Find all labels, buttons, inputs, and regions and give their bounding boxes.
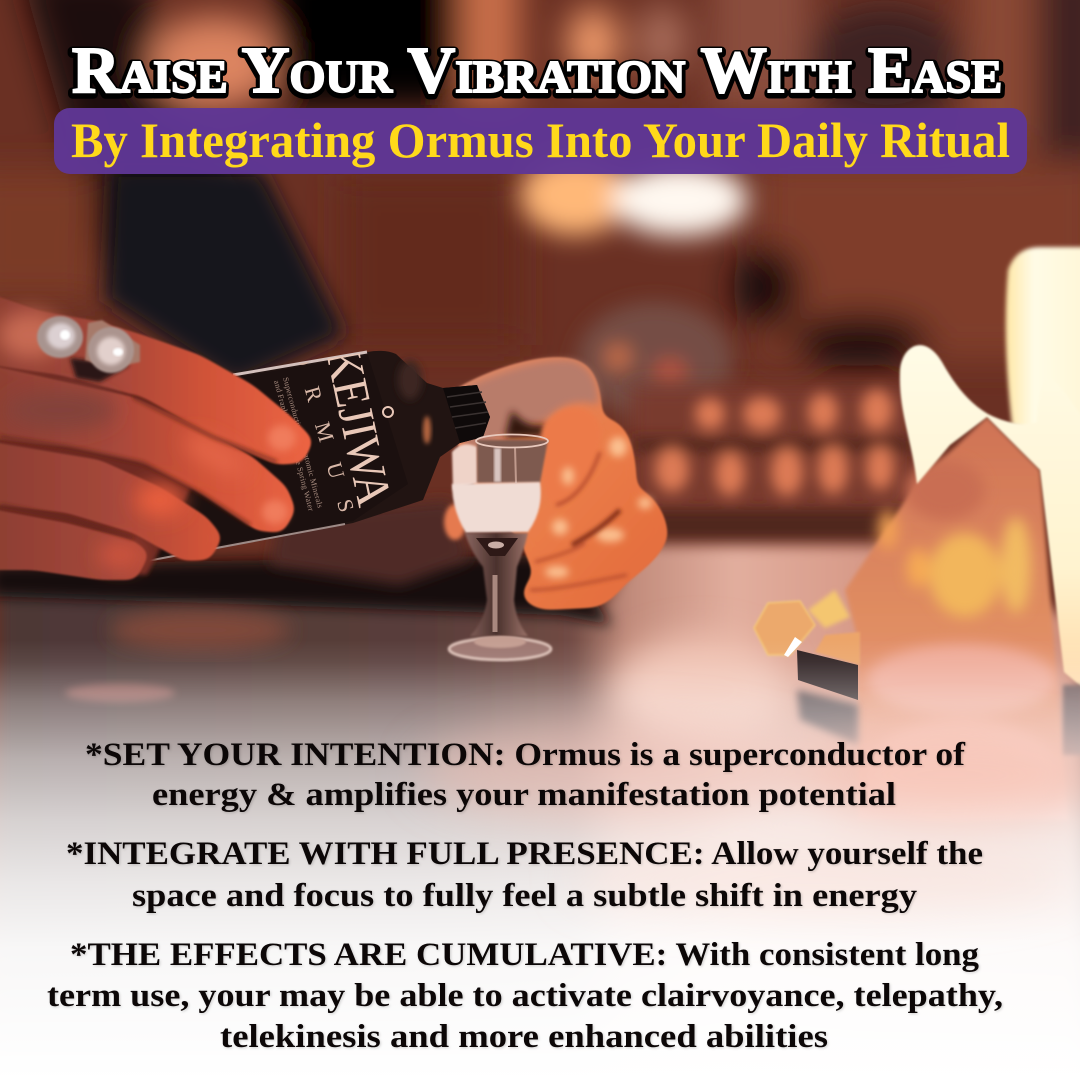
ormus bottle	[151, 350, 490, 561]
point 3: the effects are cumulative: telekinesis and more enhanced abilities	[220, 1019, 828, 1055]
point 3: the effects are cumulative	[47, 937, 1003, 1055]
bottle label	[147, 355, 408, 558]
forearm shadow on table	[0, 555, 612, 625]
warm pink wash over fade	[420, 720, 1080, 915]
liqueur glass	[449, 434, 551, 660]
point 2: integrate with full presence: space and focus to fully feel a subtle shift in energy	[132, 878, 918, 914]
pearl rings	[37, 316, 140, 382]
fade to white under text	[0, 640, 1080, 1080]
blurred patterned tray	[630, 385, 915, 515]
point 1: set your intention	[85, 737, 966, 813]
point 2: integrate with full presence: *INTEGRATE WITH FULL PRESENCE: Allow yourself the	[66, 836, 983, 872]
bottle label text: ORMUS	[289, 346, 360, 515]
small faceted crystal and dark stone	[754, 590, 860, 745]
subtitle banner: By Integrating Ormus Into Your Daily Ritual	[71, 112, 1010, 168]
poured ormus stream	[452, 444, 478, 490]
point 1: set your intention: *SET YOUR INTENTION: Ormus is a superconductor of	[85, 737, 966, 773]
crystal point	[845, 417, 1068, 820]
bottle label text: Superconductive Monoatomic Minerals	[281, 376, 325, 509]
forearm behind bottle	[270, 500, 470, 585]
far hand holding glass	[440, 357, 668, 610]
title: raise your vibration with ease: Raise Your Vibration With Ease	[72, 34, 1002, 107]
table surface	[0, 545, 1080, 1080]
point 3: the effects are cumulative: term use, your may be able to activate clairvoyance, telepathy,	[47, 978, 1003, 1014]
bottle label text	[274, 354, 394, 512]
crystal ball blur	[577, 302, 733, 418]
glass of ormus liquid	[452, 482, 541, 533]
title: raise your vibration with ease: Raise Your Vibration With Ease	[71, 36, 1003, 109]
bottle label text: KEJIWA	[315, 343, 403, 511]
point 1: set your intention: energy & amplifies your manifestation potential	[152, 777, 896, 813]
point 3: the effects are cumulative: *THE EFFECTS ARE CUMULATIVE: With consistent long	[70, 937, 980, 973]
bottle label text: and Frankincense in Pure Spring Water	[272, 379, 316, 512]
lit candles	[900, 247, 1080, 755]
blurred background shapes	[0, 0, 1080, 366]
point 2: integrate with full presence	[66, 836, 983, 914]
dark jacket sleeve	[105, 170, 345, 385]
lamp glow	[520, 155, 748, 236]
near hand with rings	[0, 290, 314, 580]
